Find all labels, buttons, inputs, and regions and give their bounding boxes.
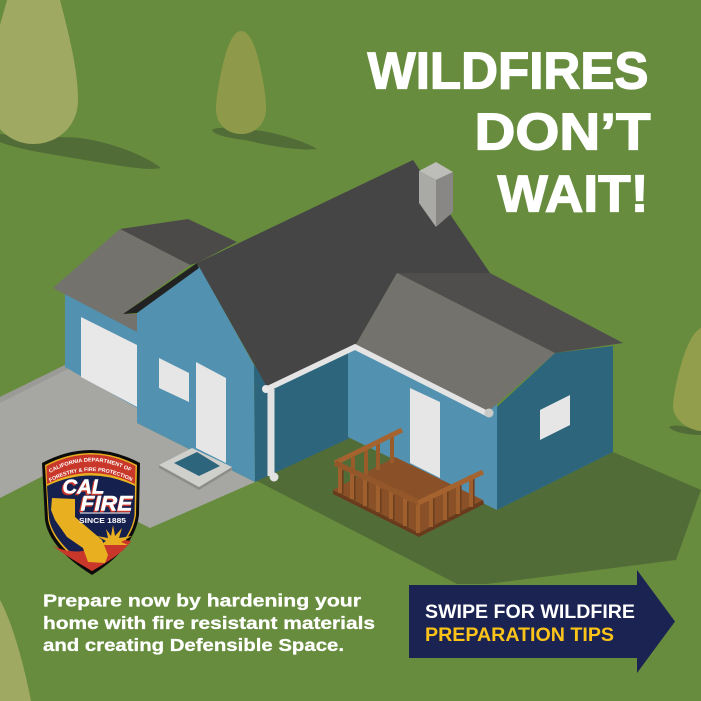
door step [159, 448, 232, 490]
arrow: swipe callout: PREPARATION TIPS [425, 625, 614, 646]
roof: right light slope [355, 273, 555, 412]
roof: right back slope [397, 273, 623, 353]
roof: garage valley shadow [123, 263, 199, 314]
chimney [419, 162, 453, 227]
logo: CAL FIRE wordmark: CAL [61, 478, 103, 500]
deck right posts [429, 475, 473, 527]
body text: and creating Defensible Space. [43, 635, 344, 655]
roof: garage light slope [53, 229, 190, 332]
logo: since 1885: SINCE 1885 [79, 516, 127, 525]
deck front posts [338, 466, 420, 533]
logo: sun [97, 525, 132, 545]
title [368, 42, 651, 224]
deck floor [333, 457, 483, 533]
roof: main dark slope [197, 160, 490, 387]
deck back rail posts [351, 436, 394, 483]
deck front rail [335, 463, 420, 503]
door: porch [410, 388, 440, 478]
logo: CAL FIRE wordmark: CAL [62, 476, 104, 498]
window: right side [540, 395, 570, 440]
tree: small top centre [212, 31, 317, 149]
wall: garage [65, 290, 137, 408]
logo: CAL FIRE shield: CALIFORNIA DEPARTMENT OF [49, 458, 132, 472]
arrow: swipe callout [409, 570, 675, 673]
house [53, 160, 623, 537]
deck [333, 430, 484, 537]
wall: porch front [348, 345, 497, 510]
door: main front [196, 362, 226, 463]
wall: main front [137, 266, 255, 482]
deck front post shadows [342, 470, 475, 527]
wall: right side [497, 346, 613, 510]
deck right rail [418, 472, 483, 503]
title: DON’T [474, 104, 651, 162]
garage door [81, 317, 137, 407]
body text: Prepare now by hardening your [43, 590, 361, 610]
logo: California state [51, 498, 108, 563]
logo: CAL FIRE shield [42, 450, 140, 575]
tree: large top left [0, 0, 161, 169]
gutters and downspout [262, 347, 494, 482]
logo: CAL FIRE wordmark: FIRE [80, 492, 134, 516]
arrow: swipe callout: SWIPE FOR WILDFIRE [425, 602, 635, 623]
logo: CAL FIRE shield: FORESTRY & FIRE PROTECTION [48, 467, 133, 482]
tree: bottom left [0, 600, 31, 701]
window: main front [159, 358, 189, 402]
body text [43, 590, 375, 655]
title: WAIT! [498, 166, 648, 224]
deck back rail [335, 430, 402, 463]
tree: right edge [669, 328, 701, 435]
driveway [0, 365, 255, 528]
logo: CAL FIRE wordmark [61, 476, 134, 517]
roof: garage back slope [120, 219, 237, 265]
body text: home with fire resistant materials [43, 613, 375, 633]
title: WILDFIRES [368, 42, 648, 100]
wall: main side [254, 345, 350, 482]
logo: CAL FIRE wordmark: FIRE [79, 494, 133, 517]
house shadow on grass [255, 437, 701, 584]
logo: red hills [53, 540, 131, 571]
